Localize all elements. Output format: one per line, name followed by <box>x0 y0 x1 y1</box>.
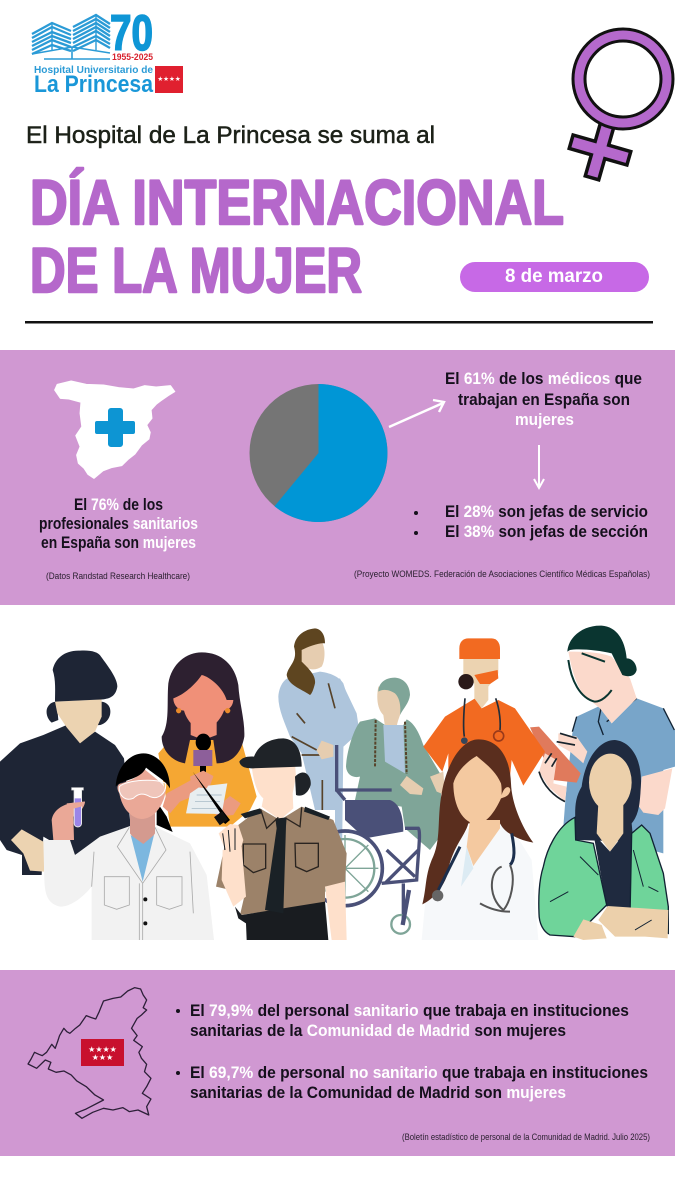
pie chart: 61 percent <box>250 384 388 522</box>
icon: Madrid flag: ★★★★ <box>88 1045 117 1054</box>
figure: scientist in lab coat <box>43 753 214 940</box>
logo: Hospital La Princesa 70 years: Hospital Universitario de <box>34 64 153 76</box>
list item: 69,7 percent: sanitarias de la Comunidad de Madrid son mujeres <box>190 1084 566 1102</box>
list item: 79,9 percent: sanitarias de la Comunidad de Madrid son mujeres <box>190 1022 566 1040</box>
title <box>30 168 564 306</box>
figure: caregiver pushing wheelchair <box>278 628 360 887</box>
logo: Hospital La Princesa 70 years: 70 <box>110 5 153 61</box>
list item: 79,9 percent: El 79,9% del personal sanitario que trabaja en instituciones <box>190 1002 629 1020</box>
icon: map of Spain with cross <box>55 381 175 478</box>
list: heads of service and section <box>414 503 648 541</box>
figure: wheelchair with elderly woman <box>308 678 445 934</box>
title: DE LA MUJER <box>30 236 362 306</box>
text: 61 percent: mujeres <box>515 411 574 429</box>
icon: Madrid flag <box>81 1039 124 1066</box>
text: 76 percent <box>39 496 198 552</box>
figure: doctor <box>422 739 538 940</box>
list item: 79,9 percent <box>176 1002 629 1040</box>
text: 61 percent: trabajan en España son <box>458 391 630 409</box>
logo: Hospital La Princesa 70 years: 1955-2025 <box>112 52 153 62</box>
logo: Hospital La Princesa 70 years: ★★★★ <box>157 75 181 83</box>
figure: chef <box>0 651 131 875</box>
list item: 69,7 percent: El 69,7% de personal no sanitario que trabaja en instituciones <box>190 1064 648 1082</box>
figure: reporter <box>158 652 257 827</box>
panel: Spain statistics <box>0 350 675 605</box>
illustration: group of working women <box>0 626 675 940</box>
list: heads of service and section: El 28% son jefas de servicio <box>445 503 648 521</box>
date pill <box>460 262 649 292</box>
figure: nurse in blue scrubs <box>530 626 675 853</box>
text: 76 percent: El 76% de los <box>74 496 163 514</box>
icon: Madrid flag: ★★★ <box>92 1053 113 1062</box>
text: 61 percent: El 61% de los médicos que <box>445 370 642 388</box>
figure: woman in green jacket <box>539 740 668 940</box>
figure: police officer <box>193 738 347 940</box>
title: DÍA INTERNACIONAL <box>30 168 564 238</box>
figure: surgeon in orange <box>423 638 545 786</box>
icon: venus symbol <box>563 35 667 186</box>
text: 61 percent <box>445 370 642 429</box>
logo: Hospital La Princesa 70 years: La Princesa <box>34 71 154 98</box>
arrow: down <box>534 445 544 488</box>
source: Randstad: (Datos Randstad Research Healthcare) <box>46 571 190 581</box>
icon: map of Madrid region <box>28 988 151 1118</box>
logo: Hospital La Princesa 70 years <box>32 5 183 98</box>
subtitle: El Hospital de La Princesa se suma al <box>26 122 435 149</box>
date pill: 8 de marzo <box>505 266 603 287</box>
text: 76 percent: profesionales sanitarios <box>39 515 198 533</box>
panel: Madrid statistics <box>0 970 675 1156</box>
list: heads of service and section: El 38% son jefas de sección <box>445 523 648 541</box>
arrow: pie to text <box>389 400 444 427</box>
text: 76 percent: en España son mujeres <box>41 534 196 552</box>
source: WOMEDS: (Proyecto WOMEDS. Federación de Asociaciones Científico Médicas Españolas) <box>354 569 650 579</box>
list item: 69,7 percent <box>176 1064 648 1102</box>
